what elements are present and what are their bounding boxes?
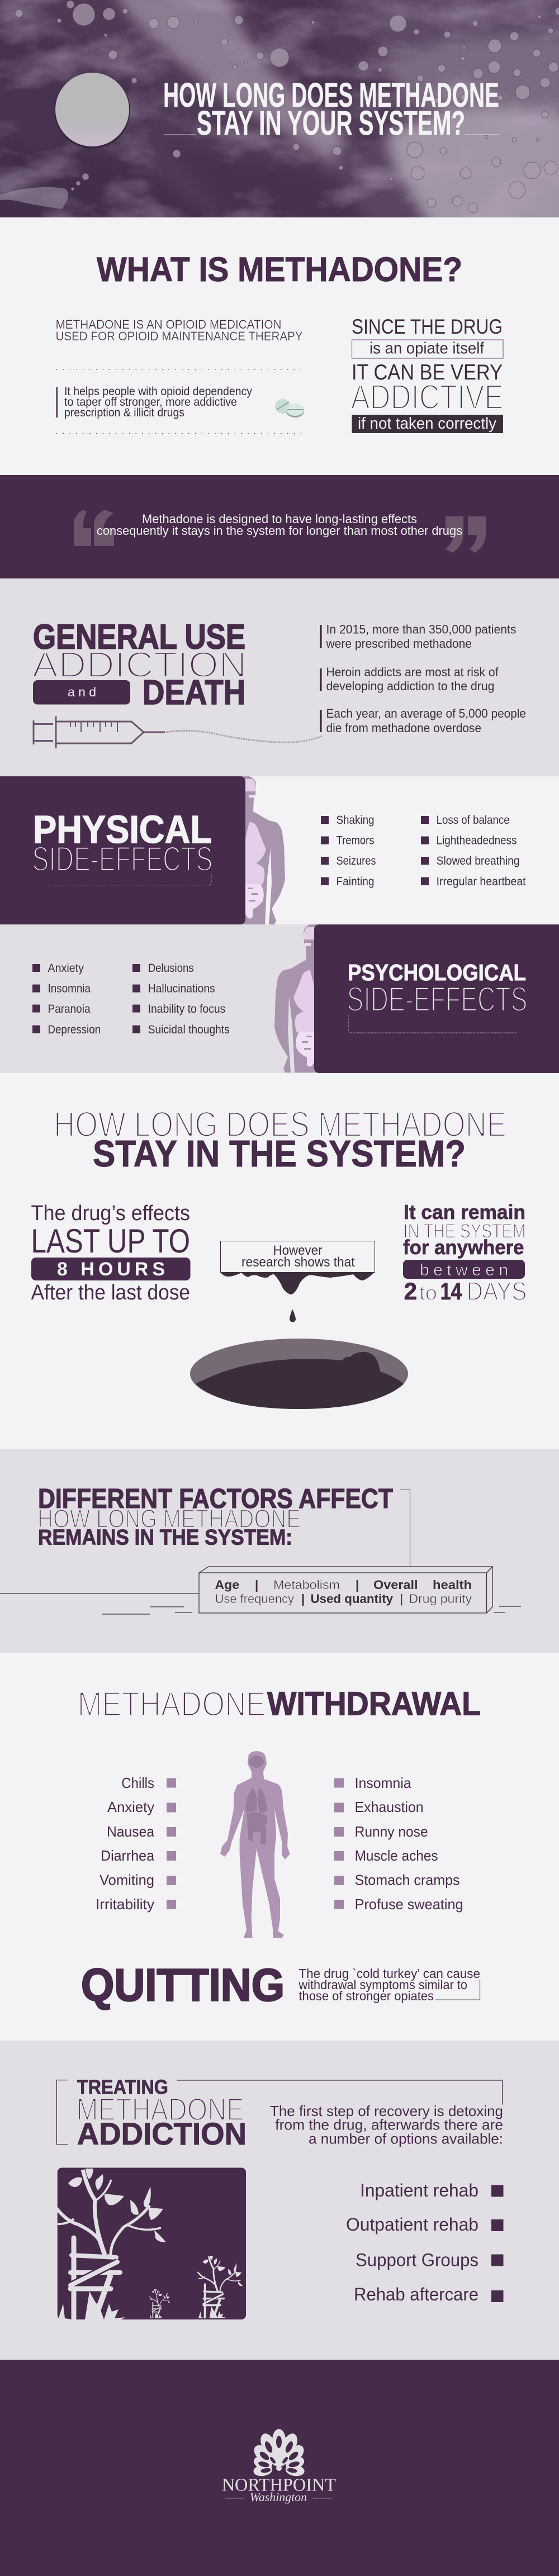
heading: general use addiction and death: and bbox=[68, 685, 96, 699]
treatment options list: Outpatient rehab bbox=[346, 2214, 479, 2235]
treatment options list bbox=[346, 2180, 503, 2304]
panel: physical side effects bbox=[0, 776, 559, 924]
psychological heading card bbox=[314, 924, 559, 1073]
panel: quote band bbox=[0, 475, 559, 578]
stat list: die from methadone overdose bbox=[326, 721, 481, 735]
left symptom list: Nausea bbox=[107, 1823, 155, 1840]
right symptom list: Profuse sweating bbox=[355, 1896, 463, 1913]
factors box: Drug purity bbox=[409, 1592, 472, 1606]
factors box: | bbox=[400, 1592, 403, 1606]
left column: effects last up to 8 hours: LAST UP TO bbox=[31, 1222, 190, 1260]
physical heading card: PHYSICAL bbox=[33, 808, 212, 851]
recovery text: The first step of recovery is detoxing bbox=[270, 2103, 503, 2119]
icon: pills bbox=[275, 399, 304, 418]
heading: how long: STAY IN THE SYSTEM? bbox=[93, 1133, 466, 1175]
stat list: developing addiction to the drug bbox=[326, 679, 494, 693]
physical symptom list: Tremors bbox=[337, 834, 375, 847]
physical symptom list: Seizures bbox=[337, 855, 376, 867]
psychological heading card: PSYCHOLOGICAL bbox=[348, 960, 526, 985]
physical symptom list: Loss of balance bbox=[437, 814, 510, 827]
physical symptom list: Fainting bbox=[337, 875, 375, 888]
stat list: In 2015, more than 350,000 patients bbox=[326, 623, 517, 636]
right symptom list: Muscle aches bbox=[355, 1847, 438, 1864]
hero pill disc bbox=[54, 73, 130, 149]
heading: general use addiction and death: GENERAL USE bbox=[33, 618, 245, 656]
psychological symptom list: Depression bbox=[48, 1023, 101, 1036]
right column: remains 2 to 14 days: IN THE SYSTEM bbox=[404, 1221, 525, 1242]
physical symptom list: Lightheadedness bbox=[437, 834, 517, 847]
heading: treating: METHADONE bbox=[76, 2091, 244, 2127]
heading: general use addiction and death: DEATH bbox=[143, 673, 245, 712]
quote text: consequently it stays in the system for longer than most other drugs bbox=[97, 524, 462, 538]
right column: remains 2 to 14 days bbox=[403, 1201, 527, 1306]
heading: different factors bbox=[37, 1484, 393, 1550]
callout: since the drug: is an opiate itself bbox=[369, 340, 485, 358]
heading: treating bbox=[76, 2075, 247, 2151]
definition text: USED FOR OPIOID MAINTENANCE THERAPY bbox=[56, 329, 303, 343]
factors box: | bbox=[301, 1592, 305, 1606]
hero title bbox=[163, 76, 499, 142]
physical heading card bbox=[0, 776, 245, 924]
physical symptom list: Irregular heartbeat bbox=[437, 875, 526, 888]
icon: closing quote mark bbox=[446, 516, 486, 553]
quitting text bbox=[298, 1966, 480, 2003]
psychological symptom list: Suicidal thoughts bbox=[148, 1023, 230, 1036]
heading: quitting: QUITTING bbox=[81, 1960, 285, 2011]
factors box: Age bbox=[215, 1578, 239, 1592]
left symptom list: Chills bbox=[121, 1775, 154, 1791]
treatment options list: Inpatient rehab bbox=[360, 2180, 479, 2200]
panel: different factors bbox=[0, 1449, 559, 1653]
right column: remains 2 to 14 days: between bbox=[420, 1261, 508, 1279]
right symptom list: Runny nose bbox=[355, 1823, 428, 1840]
quitting text: those of stronger opiates bbox=[299, 1989, 434, 2003]
right symptom list: Insomnia bbox=[355, 1775, 411, 1791]
definition text bbox=[56, 317, 303, 343]
quote text: Methadone is designed to have long-lasting effects bbox=[142, 512, 417, 526]
small tree bbox=[149, 2289, 170, 2318]
heading: general use addiction and death: ADDICTION bbox=[32, 644, 247, 685]
right symptom list: Exhaustion bbox=[355, 1799, 424, 1815]
stat list: Each year, an average of 5,000 people bbox=[326, 706, 526, 720]
dashed needle trail bbox=[166, 730, 322, 742]
left symptom list: Irritability bbox=[96, 1896, 154, 1913]
logo wordmark: Washington bbox=[250, 2490, 307, 2504]
psychological symptom list: Hallucinations bbox=[148, 983, 215, 995]
heading: different factors: DIFFERENT FACTORS AFFECT bbox=[38, 1484, 393, 1514]
panel: methadone withdrawal bbox=[0, 1653, 559, 2041]
heading: different factors: HOW LONG METHADONE bbox=[37, 1504, 301, 1533]
hero banner bbox=[0, 0, 559, 235]
right column: remains 2 to 14 days: 2 bbox=[404, 1278, 417, 1305]
panel: treating methadone addiction bbox=[0, 2041, 559, 2360]
icon: half body bbox=[240, 776, 285, 924]
icon: full body bbox=[220, 1751, 290, 1938]
physical symptom list: Shaking bbox=[337, 814, 375, 827]
hero bubbles bbox=[15, 1, 559, 213]
icon: syringe bbox=[34, 717, 165, 748]
right symptom list: Stomach cramps bbox=[355, 1871, 460, 1888]
left column: effects last up to 8 hours: The drug’s effects bbox=[31, 1202, 190, 1225]
factors box: Metabolism bbox=[273, 1578, 340, 1592]
droplet bbox=[290, 1309, 296, 1322]
callout: since the drug: IT CAN BE VERY bbox=[352, 360, 503, 385]
heading: how long bbox=[54, 1104, 506, 1175]
panel: footer bbox=[0, 2360, 559, 2576]
heading: methadone withdrawal bbox=[77, 1685, 481, 1724]
heading: general use addiction and death bbox=[32, 618, 247, 712]
factors box: health bbox=[433, 1578, 472, 1592]
dependency text with bar: to taper off stronger, more addictive bbox=[64, 396, 237, 409]
stat list bbox=[320, 623, 526, 735]
logo wordmark bbox=[222, 2475, 336, 2504]
factors box: Overall bbox=[373, 1578, 418, 1592]
stat list: were prescribed methadone bbox=[326, 637, 472, 651]
callout: since the drug bbox=[351, 315, 503, 433]
panel: general use bbox=[0, 578, 559, 776]
dependency text with bar: prescription & illicit drugs bbox=[64, 406, 184, 419]
centre box: however research shows: However bbox=[273, 1243, 323, 1258]
treatment options list: Rehab aftercare bbox=[354, 2284, 479, 2304]
heading: different factors: REMAINS IN THE SYSTEM: bbox=[38, 1526, 292, 1550]
right column: remains 2 to 14 days: DAYS bbox=[466, 1277, 527, 1306]
recovery text: a number of options available: bbox=[309, 2131, 503, 2147]
physical symptom list: Slowed breathing bbox=[437, 855, 520, 867]
left symptom list: Anxiety bbox=[107, 1799, 154, 1815]
psychological symptom list bbox=[32, 962, 230, 1036]
icon: half body mirrored bbox=[274, 924, 319, 1073]
logo wordmark: NORTHPOINT bbox=[222, 2475, 336, 2496]
heading: methadone withdrawal: METHADONE bbox=[77, 1685, 266, 1724]
recovery text: from the drug, afterwards there are bbox=[275, 2117, 503, 2133]
left symptom list: Diarrhea bbox=[101, 1847, 155, 1864]
physical heading card: SIDE-EFFECTS bbox=[32, 840, 212, 879]
left column: effects last up to 8 hours: After the last dose bbox=[31, 1281, 190, 1304]
factors box: | bbox=[356, 1578, 359, 1592]
psychological symptom list: Insomnia bbox=[48, 983, 91, 995]
logo: northpoint peacock bbox=[251, 2429, 307, 2477]
factors box: Use frequency bbox=[215, 1592, 294, 1606]
right symptom list bbox=[334, 1775, 463, 1913]
recovery text bbox=[270, 2103, 503, 2147]
quote text bbox=[97, 512, 462, 538]
left column: effects last up to 8 hours: 8 HOURS bbox=[57, 1259, 165, 1280]
factors box: | bbox=[255, 1578, 258, 1592]
icon: hole bbox=[190, 1339, 408, 1409]
heading: treating: TREATING bbox=[77, 2075, 168, 2098]
callout: since the drug: SINCE THE DRUG bbox=[352, 315, 503, 338]
psychological symptom list: Anxiety bbox=[48, 962, 84, 975]
psychological symptom list: Inability to focus bbox=[148, 1003, 225, 1016]
hero marbled background bbox=[0, 0, 559, 235]
medium tree bbox=[197, 2256, 243, 2318]
quitting text: The drug `cold turkey’ can cause bbox=[299, 1966, 480, 1981]
centre box: however research shows: research shows that bbox=[241, 1255, 355, 1270]
panel: how long does methadone stay bbox=[0, 1073, 559, 1449]
factors box bbox=[199, 1567, 492, 1613]
drip bbox=[220, 1272, 375, 1294]
panel: psychological side effects bbox=[0, 924, 559, 1073]
dependency text with bar bbox=[56, 385, 252, 419]
factors box: Used quantity bbox=[311, 1592, 394, 1606]
psychological symptom list: Delusions bbox=[148, 962, 194, 975]
right column: remains 2 to 14 days: 14 bbox=[440, 1278, 462, 1305]
heading: treating: ADDICTION bbox=[77, 2116, 247, 2151]
definition text: METHADONE IS AN OPIOID MEDICATION bbox=[56, 317, 282, 331]
physical symptom list bbox=[321, 814, 526, 888]
right column: remains 2 to 14 days: to bbox=[419, 1281, 437, 1304]
illustration: splinted trees bbox=[56, 2167, 246, 2320]
quitting text: withdrawal symptoms similar to bbox=[298, 1977, 467, 1992]
left column: effects last up to 8 hours bbox=[31, 1202, 190, 1304]
stat list: Heroin addicts are most at risk of bbox=[326, 665, 499, 679]
hero bottom left wisp bbox=[0, 187, 68, 209]
callout: since the drug: if not taken correctly bbox=[358, 415, 496, 433]
left symptom list bbox=[96, 1775, 176, 1913]
icon: opening quote mark bbox=[74, 510, 114, 546]
psychological symptom list: Paranoia bbox=[48, 1003, 91, 1016]
centre box: however research shows bbox=[220, 1241, 375, 1322]
large tree bbox=[56, 2169, 166, 2320]
panel: what is methadone bbox=[0, 217, 559, 475]
callout: since the drug: ADDICTIVE bbox=[351, 378, 503, 417]
right column: remains 2 to 14 days: for anywhere bbox=[403, 1236, 524, 1259]
right column: remains 2 to 14 days: It can remain bbox=[404, 1201, 525, 1223]
heading: methadone withdrawal: WITHDRAWAL bbox=[267, 1686, 481, 1723]
treatment options list: Support Groups bbox=[356, 2250, 479, 2270]
left symptom list: Vomiting bbox=[100, 1871, 154, 1888]
heading: what is methadone: WHAT IS METHADONE? bbox=[97, 250, 462, 288]
dependency text with bar: It helps people with opioid dependency bbox=[64, 385, 252, 398]
